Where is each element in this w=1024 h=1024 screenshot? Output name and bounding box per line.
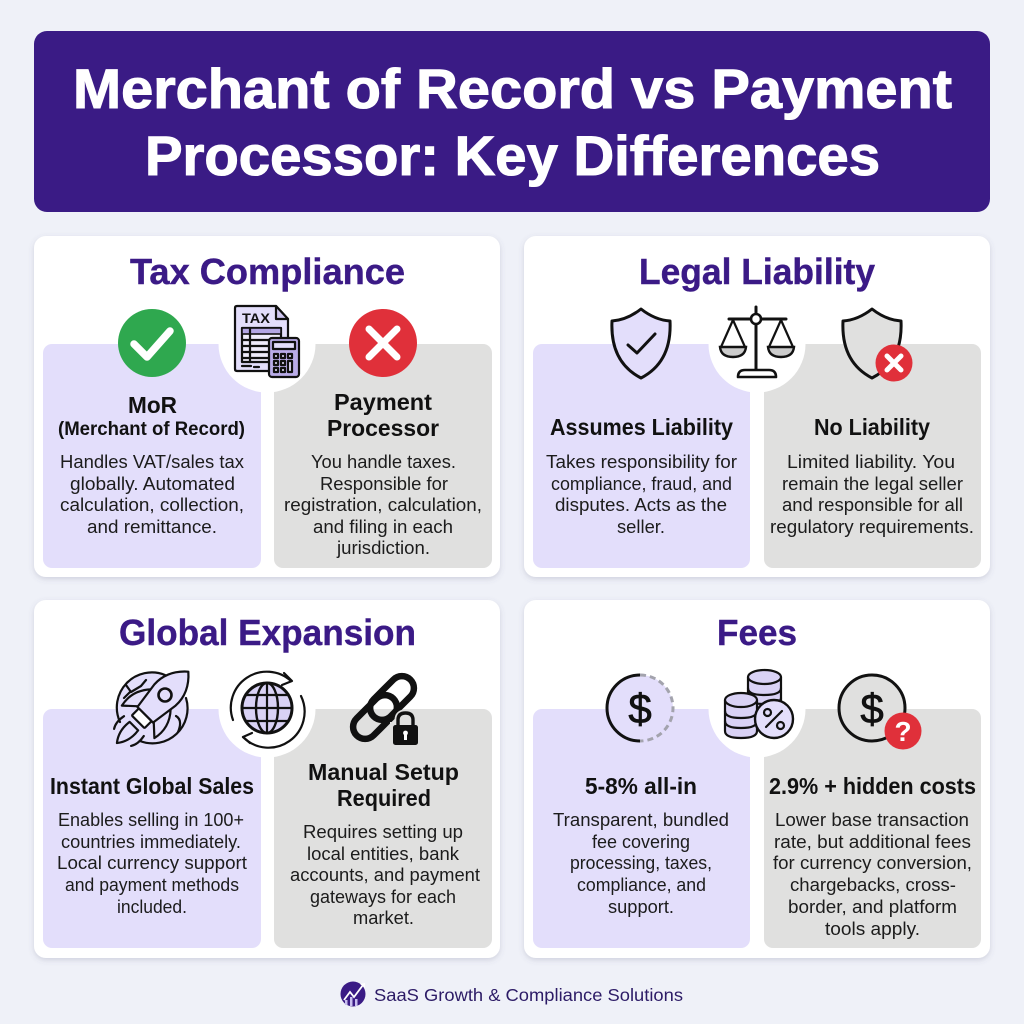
panel: legal liability (524, 236, 990, 577)
text: no liability: regulatory requirements. (770, 516, 974, 537)
title banner: Processor: Key Differences (145, 124, 880, 187)
text: no liability (770, 451, 974, 537)
text: hidden costs: rate, but additional fees (774, 831, 971, 852)
text: MoR tax (60, 451, 245, 537)
text: manual setup: gateways for each (310, 886, 456, 907)
text: instant global sales: Local currency support (57, 852, 247, 873)
icon: coin stacks with percent (725, 670, 793, 738)
text: assumes liability: compliance, fraud, and (551, 473, 732, 494)
icon: tax form and calculator: TAX (242, 310, 271, 326)
text: manual setup: local entities, bank (307, 843, 460, 864)
panel: tax compliance (34, 236, 500, 577)
text: processor tax: jurisdiction. (336, 537, 430, 558)
column heading: payment processor (327, 389, 439, 441)
text: all-in fee: compliance, and (577, 874, 706, 895)
icon: globe with rotation arrows (231, 672, 305, 748)
text: processor tax (284, 451, 482, 558)
text: MoR tax: calculation, collection, (60, 494, 244, 515)
icon: tax form and calculator (235, 306, 299, 377)
panel: fees (524, 600, 990, 958)
text: processor tax: registration, calculation, (284, 494, 482, 515)
text: all-in fee: support. (608, 896, 674, 917)
text: assumes liability: seller. (617, 516, 665, 537)
icon: dollar with red question: ? (894, 716, 912, 747)
text: all-in fee: fee covering (592, 831, 690, 852)
column heading: 5-8% all-in: 5-8% all-in (585, 773, 697, 799)
column heading: MoR: (Merchant of Record) (58, 419, 245, 440)
icon: partial dollar circle (607, 675, 673, 741)
text: hidden costs: tools apply. (825, 918, 920, 939)
heading: tax compliance: Tax Compliance (130, 251, 405, 292)
column heading: manual setup required: Manual Setup (308, 759, 459, 785)
text: manual setup: accounts, and payment (290, 864, 480, 885)
text: manual setup: market. (353, 907, 414, 928)
text: instant global sales: and payment methods (65, 874, 239, 895)
text: MoR tax: and remittance. (87, 516, 217, 537)
column heading: payment processor: Processor (327, 415, 439, 441)
text: no liability: Limited liability. You (787, 451, 955, 472)
column heading: payment processor: Payment (334, 389, 432, 415)
column heading: instant global sales: Instant Global Sales (50, 773, 254, 799)
text: processor tax: Responsible for (320, 473, 448, 494)
icon: dollar with red question: $ (860, 685, 884, 732)
text: hidden costs: Lower base transaction (775, 809, 969, 830)
column heading: manual setup required (308, 759, 459, 811)
text: manual setup (290, 821, 480, 928)
text: all-in fee: Transparent, bundled (553, 809, 729, 830)
icon: partial dollar circle: $ (628, 685, 652, 732)
icon: green check (118, 309, 186, 377)
column heading: MoR (58, 392, 245, 440)
heading: global expansion: Global Expansion (119, 612, 416, 653)
column heading: MoR: MoR (128, 392, 177, 418)
icon: balance scales (720, 307, 794, 377)
icon: growth logo (340, 982, 366, 1006)
text: no liability: remain the legal seller (782, 473, 963, 494)
text: hidden costs (773, 809, 972, 939)
column heading: manual setup required: Required (337, 785, 431, 811)
text: assumes liability (546, 451, 737, 537)
text: all-in fee (553, 809, 729, 917)
title banner (34, 31, 990, 212)
text: assumes liability: disputes. Acts as the (555, 494, 727, 515)
text: all-in fee: processing, taxes, (570, 852, 712, 873)
text: instant global sales: countries immediately. (61, 831, 241, 852)
heading: legal liability: Legal Liability (639, 251, 875, 292)
column heading: 2.9% + hidden costs: 2.9% + hidden costs (769, 773, 976, 799)
text: assumes liability: Takes responsibility for (546, 451, 737, 472)
panel: global expansion (34, 600, 500, 958)
text: MoR tax: globally. Automated (70, 473, 235, 494)
text: instant global sales: Enables selling in 100+ (58, 809, 244, 830)
text: hidden costs: chargebacks, cross- (790, 874, 956, 895)
title banner: Merchant of Record vs Payment (73, 57, 952, 120)
text: hidden costs: for currency conversion, (773, 852, 972, 873)
text: MoR tax: Handles VAT/sales tax (60, 451, 245, 472)
icon: shield with check (612, 309, 670, 378)
text: instant global sales (57, 809, 247, 917)
text: processor tax: You handle taxes. (311, 451, 456, 472)
footer brand (340, 982, 683, 1006)
text: processor tax: and filing in each (313, 516, 453, 537)
footer brand: SaaS Growth & Compliance Solutions (374, 985, 683, 1005)
icon: chain link with padlock (348, 671, 421, 748)
icon: shield with red cross (843, 309, 912, 382)
column heading: no liability: No Liability (814, 414, 930, 440)
heading: fees: Fees (717, 612, 797, 653)
icon: red cross (349, 309, 417, 377)
text: manual setup: Requires setting up (303, 821, 463, 842)
column heading: assumes liability: Assumes Liability (550, 414, 733, 440)
text: instant global sales: included. (117, 896, 187, 917)
icon: dollar with red question (839, 675, 922, 750)
text: hidden costs: border, and platform (788, 896, 957, 917)
text: no liability: and responsible for all (782, 494, 963, 515)
icon: rocket and globe (100, 655, 205, 760)
